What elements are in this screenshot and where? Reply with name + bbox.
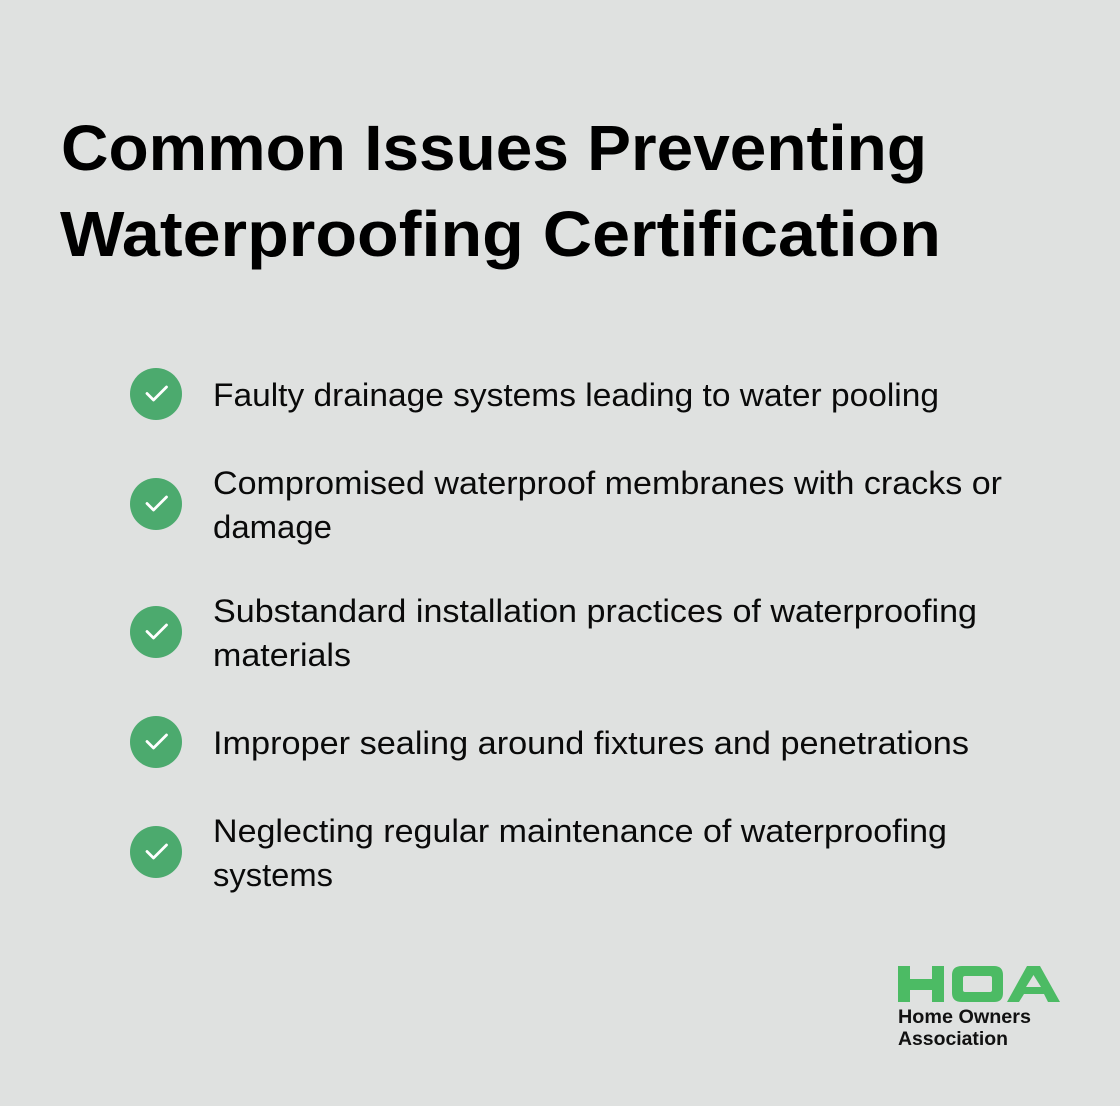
list item 3 — [130, 593, 977, 673]
list item 3: materials — [213, 637, 351, 673]
icon: check 1 — [130, 368, 182, 420]
list item 1 — [130, 368, 939, 420]
list item 4: Improper sealing around fixtures and penetrations — [213, 725, 969, 761]
title: Common Issues Preventing — [61, 112, 927, 184]
icon: check 3 — [130, 606, 182, 658]
list item 5: Neglecting regular maintenance of waterproofing — [213, 813, 947, 849]
list item 3: Substandard installation practices of waterproofing — [213, 593, 977, 629]
list item 2 — [130, 465, 1002, 545]
list item 2: Compromised waterproof membranes with cracks or — [213, 465, 1002, 501]
icon: check 5 — [130, 826, 182, 878]
logo: HOA — [898, 966, 1060, 1050]
list item 1: Faulty drainage systems leading to water pooling — [213, 377, 939, 413]
list item 4 — [130, 716, 969, 768]
title — [60, 112, 941, 270]
list item 2: damage — [213, 509, 332, 545]
logo text: Home Owners — [898, 1006, 1031, 1028]
list item 5: systems — [213, 857, 333, 893]
icon: check 2 — [130, 478, 182, 530]
logo: HOA: Association — [898, 1028, 1008, 1050]
title: Waterproofing Certification — [60, 198, 941, 270]
logo mark — [898, 966, 1060, 1002]
list item 5 — [130, 813, 947, 893]
icon: check 4 — [130, 716, 182, 768]
